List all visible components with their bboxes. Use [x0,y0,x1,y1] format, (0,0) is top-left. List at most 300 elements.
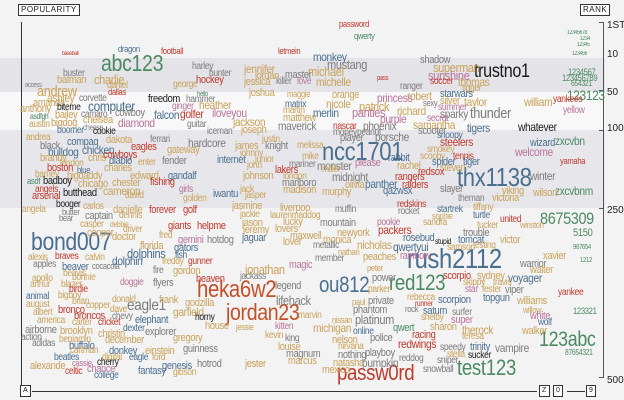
big word: passw0rd: passw0rd [337,360,414,385]
small words: cassie [72,358,92,368]
small words: rainbow [400,250,430,262]
x-axis: 9 [589,387,593,394]
small words: eagles [131,141,157,153]
big word: bond007: bond007 [31,228,111,256]
small words: joshua [249,87,275,99]
small words: tomcat [458,234,484,246]
small words: madison [283,184,316,196]
small words: 1234567 [568,67,595,77]
small words: snowball [423,364,453,375]
small words: heather [199,98,231,112]
small words: winter [530,169,555,183]
small words: marvin [298,310,321,321]
small words: tiffany [473,202,493,213]
x-axis: Z [542,387,547,394]
small words: helpme [197,220,226,232]
small words: freddy [162,256,184,267]
small words: anthony [20,103,51,115]
small words: nelson [332,334,358,346]
small words: london [60,158,83,169]
small words: parker [368,284,390,295]
small words: gordon [173,265,200,277]
small words: alexande [30,360,65,372]
small words: matrix [285,99,306,110]
small words: jonathan [245,262,285,277]
small words: gregory [173,332,202,344]
small words: black [40,140,60,152]
small words: dave [110,304,127,315]
small words: mountain [320,217,356,229]
rank axis: 10 [607,49,618,60]
small words: member [315,253,344,264]
small words: bonnie [72,272,95,283]
small words: lucky [283,216,303,228]
small words: florida [140,240,163,252]
small words: garfield [173,305,204,319]
small words: cheese [83,123,103,132]
rank axis [580,4,624,386]
small words: tigger [462,83,481,94]
small words: redwings [398,337,436,351]
small words: secret [427,113,448,124]
small words: victor [500,234,520,246]
small words: nicole [326,97,351,111]
small words: taylor [464,95,487,109]
small words: benjamin [59,334,91,345]
small words: chance [87,363,115,375]
small words: dolphin [112,254,143,268]
small words: butter [62,207,80,217]
small words: golf [183,204,197,216]
small words: dragon [118,44,140,54]
small words: animal [26,291,49,302]
small words: maverick [278,119,316,133]
small words: girls [179,184,193,195]
small words: brian [72,296,89,307]
small words: fester [482,284,501,295]
small words: magic [289,259,312,271]
small words: orange [332,89,359,101]
small words: iwantu [213,188,238,200]
small words: melissa [297,140,323,151]
small words: joseph [241,124,267,136]
small words: rocket [398,206,419,217]
small words: magnum [286,348,320,360]
big word: trustno1: trustno1 [474,61,530,82]
small words: apples [33,259,56,270]
small words: tucker [477,220,498,231]
small words: august [26,299,49,310]
small words: bailey [55,109,77,121]
small words: action [21,332,42,343]
small words: chicken [82,143,114,157]
small words: star [465,284,478,295]
small words: laurenmaddog [270,210,320,221]
small words: debbie [110,220,128,229]
big word: heka6w2: heka6w2 [197,276,276,303]
small words: panties [352,105,385,120]
small words: pass [377,75,388,82]
small words: 12345678 [567,30,587,36]
small words: superman [433,60,479,75]
small words: fire [153,265,163,276]
small words: cocacola [92,261,119,271]
small words: shadow [420,54,450,66]
small words: fantasy [138,365,166,377]
small words: broncos [74,310,105,322]
small words: bigboy [58,290,81,301]
small words: michael [308,64,344,79]
small words: daniel [107,80,128,91]
small words: theman [458,193,484,204]
small words: summer [438,102,467,113]
small words: wilson [533,187,557,199]
small words: therock [462,323,493,337]
small words: gators [174,242,198,254]
small words: surfer [452,307,472,318]
small words: thunder [470,105,511,122]
small words: online [353,326,374,337]
small words: alexis [28,252,48,263]
small words: 123321 [573,306,596,316]
small words: einstein [145,345,175,357]
small words: golden [183,193,206,204]
small words: rangers [395,171,424,183]
small words: gateway [167,144,199,156]
small words: diablo [109,155,132,167]
small words: chris [88,152,106,164]
small words: playboy [365,347,395,359]
small words: jasper [245,190,266,201]
small words: qwerty [354,31,374,41]
small words: football [161,46,183,56]
small words: williams [517,295,547,307]
small words: falcon [154,108,179,122]
small words: mike [302,151,319,162]
small words: monica [323,234,351,246]
small words: jackson [233,115,265,129]
small words: peanut [357,127,381,138]
small words: nascar [333,121,356,132]
small words: camaro [81,109,107,120]
small words: metallic [313,240,339,251]
small words: viking [502,185,524,197]
small words: blue [77,165,90,175]
small words: scooby [420,151,445,162]
arrow [21,22,22,390]
small words: viper [505,284,524,296]
small words: muffin [335,204,356,215]
small words: king [285,333,299,344]
popularity label: POPULARITY [21,5,77,14]
small words: butthead [63,187,97,199]
small words: albert [33,307,52,318]
small words: walter [530,264,553,276]
small words: smokey [427,144,454,155]
small words: jessica [244,76,270,88]
small words: bigdog [51,117,77,129]
small words: 123456 [572,51,587,57]
small words: scooter [418,125,446,137]
small words: killer [276,76,291,87]
small words: martin [283,105,305,116]
small words: ashley [47,91,74,105]
small words: wizard [530,137,555,149]
small words: newyork [337,227,369,239]
small words: 123123 [567,87,605,103]
small words: computer [88,98,135,114]
small words: calvin [85,252,105,263]
small words: braves [55,251,78,262]
small words: travis [493,277,511,288]
small words: sunshine [428,68,470,83]
small words: turtle [473,210,490,221]
small words: maggie [287,89,310,99]
small words: sniper [437,355,458,366]
small words: cherry [97,357,119,368]
small words: teresa [462,331,484,342]
x-axis [20,385,596,397]
small words: iceman [207,126,232,137]
small words: rebecca [407,292,435,303]
small words: qwertyui [393,240,428,254]
small words: flyers [153,277,173,289]
small words: whatever [518,120,557,134]
small words: frank [159,294,178,306]
small words: heaven [196,273,225,285]
small words: password [339,19,369,29]
small words: donald [112,294,135,305]
small words: stella [447,349,465,360]
small words: junior [255,154,274,165]
small words: sexy [423,98,437,108]
small words: batman [57,74,86,86]
small words: nirvana [338,341,364,352]
small words: john [247,160,262,171]
small words: miller [322,164,340,175]
small words: andrea [26,132,50,143]
small words: hardcore [188,136,226,150]
small words: bigdaddy [67,170,102,182]
small words: yellow [563,105,585,116]
small words: snoopy [437,130,462,141]
small words: bulldog [48,145,79,159]
big word: 8675309: 8675309 [540,209,594,228]
small words: lovers [275,223,298,235]
small words: redsox [418,166,444,178]
small words: princess [377,91,412,105]
small words: testing [473,240,496,251]
small words: godzilla [185,297,214,309]
small words: hotdog [207,234,234,246]
small words: jaguar [242,232,266,244]
small words: amanda [33,97,65,109]
small words: rachel [397,160,420,172]
small words: america [37,315,65,326]
small words: angels [35,184,58,195]
small words: brooklyn [60,325,93,337]
rank axis: 50 [607,87,618,98]
small words: sharon [430,321,457,333]
small words: 123456789 [562,73,597,83]
small words: adidas [32,338,55,349]
x-axis: A [23,387,28,394]
small words: lover [283,236,302,248]
small words: gunner [188,256,212,267]
small words: victoria [492,192,519,204]
small words: jester [245,358,266,370]
small words: nissan [332,315,352,325]
small words: giants [168,220,191,232]
small words: raiders [402,179,428,191]
small words: shelby [421,312,444,323]
small words: zxcvbnm [555,184,593,198]
small words: michigan [313,321,351,335]
small words: marcus [288,355,317,367]
small words: sydney [477,270,505,282]
small words: welcome [515,145,553,159]
small words: letmein [278,46,300,56]
small words: redskins [397,199,426,210]
small words: chevy [112,311,133,322]
small words: spider [432,156,455,168]
small words: james [235,140,258,152]
small words: steven [440,162,466,174]
small words: platinum [355,312,394,327]
small words: hunter [209,68,231,79]
small words: steelers [440,135,473,149]
small words: wolf [538,317,552,328]
small words: college [94,370,119,381]
small words: police [370,332,392,344]
small words: willow [523,305,541,315]
rank label: RANK [583,5,607,14]
small words: patrick [359,99,389,114]
small words: donkey [109,345,137,357]
small words: merlin [313,106,339,120]
small words: 987654 [573,244,591,251]
small words: carlos [83,201,104,212]
popularity label [18,4,80,16]
small words: baseball [62,51,78,57]
small words: sophie [432,211,453,221]
small words: london [283,171,306,182]
small words: apollo [32,273,53,284]
small words: horny [195,312,215,323]
small words: beaver [62,261,89,273]
small words: nicholas [357,238,392,252]
small words: rosebud [403,232,434,244]
big word: eagle1: eagle1 [127,297,166,314]
small words: casper [80,219,103,230]
small words: racing [412,329,435,341]
small words: speedy [440,342,465,353]
small words: house [205,320,229,332]
small words: marlboro [282,177,316,189]
small words: charles [104,162,132,174]
rank axis: 250 [607,205,624,216]
small words: lakers [275,164,298,176]
small words: bronco [58,304,85,316]
small words: slayer [440,183,463,195]
small words: sandra [423,217,447,228]
small words: cowboy [115,107,145,119]
small words: richard [397,104,426,118]
small words: yankees [553,94,582,105]
small words: hammer [186,94,215,105]
small words: runner [415,299,433,308]
small words: legend [275,280,301,292]
small words: gemini [178,234,204,246]
small words: boston [47,162,73,174]
small words: trinity [470,341,490,353]
small words: master [285,69,312,81]
small words: olivia [345,179,364,191]
small words: jennifer [244,62,275,76]
small words: xavier [543,250,566,262]
small words: birdie [69,284,88,295]
small words: tiger [463,156,479,168]
small words: saturn [423,305,447,317]
small words: cricket [98,317,120,328]
small words: cameron [103,184,140,198]
small words: explorer [145,326,176,338]
small words: topgun [483,292,510,304]
small words: qazwsx [383,185,412,197]
small words: peaches [363,251,396,263]
small words: carter [72,317,92,328]
small words: buster [63,68,85,79]
small words: warrior [520,258,546,270]
small words: boomer [57,125,84,136]
small words: dennis [119,210,142,221]
small words: iloveyou [212,106,247,120]
small words: digital [102,352,122,363]
small words: tennis [453,151,474,162]
small words: private [368,295,394,307]
small words: zxcvbn [555,134,585,148]
small words: silver [440,95,460,107]
small words: charlie [94,72,124,87]
small words: soccer [430,76,453,87]
small words: skippy [463,277,485,288]
x-axis: 0 [556,387,560,394]
small words: tigers [467,121,490,135]
small words: austin [29,119,50,130]
small words: reddog [399,353,423,364]
small words: beatles [54,352,79,363]
small words: celtic [65,366,82,377]
small words: access [25,82,41,89]
small words: fender [162,155,186,167]
small words: angela [22,204,45,215]
small words: edward [130,170,159,182]
small words: asdf [27,176,40,186]
small words: super [451,314,473,326]
small words: kitten [275,321,293,332]
small words: beavis [63,268,86,279]
small words: dolphins [127,246,165,261]
small words: packers [378,223,411,237]
small words: pookie [377,217,400,228]
small words: jackie [240,209,260,220]
small words: liverpoo [280,202,310,214]
small words: harley [192,61,213,72]
small words: startrek [437,204,463,215]
small words: arsenal [32,190,60,202]
small words: hockey [196,74,224,86]
small words: diamond [118,116,155,130]
